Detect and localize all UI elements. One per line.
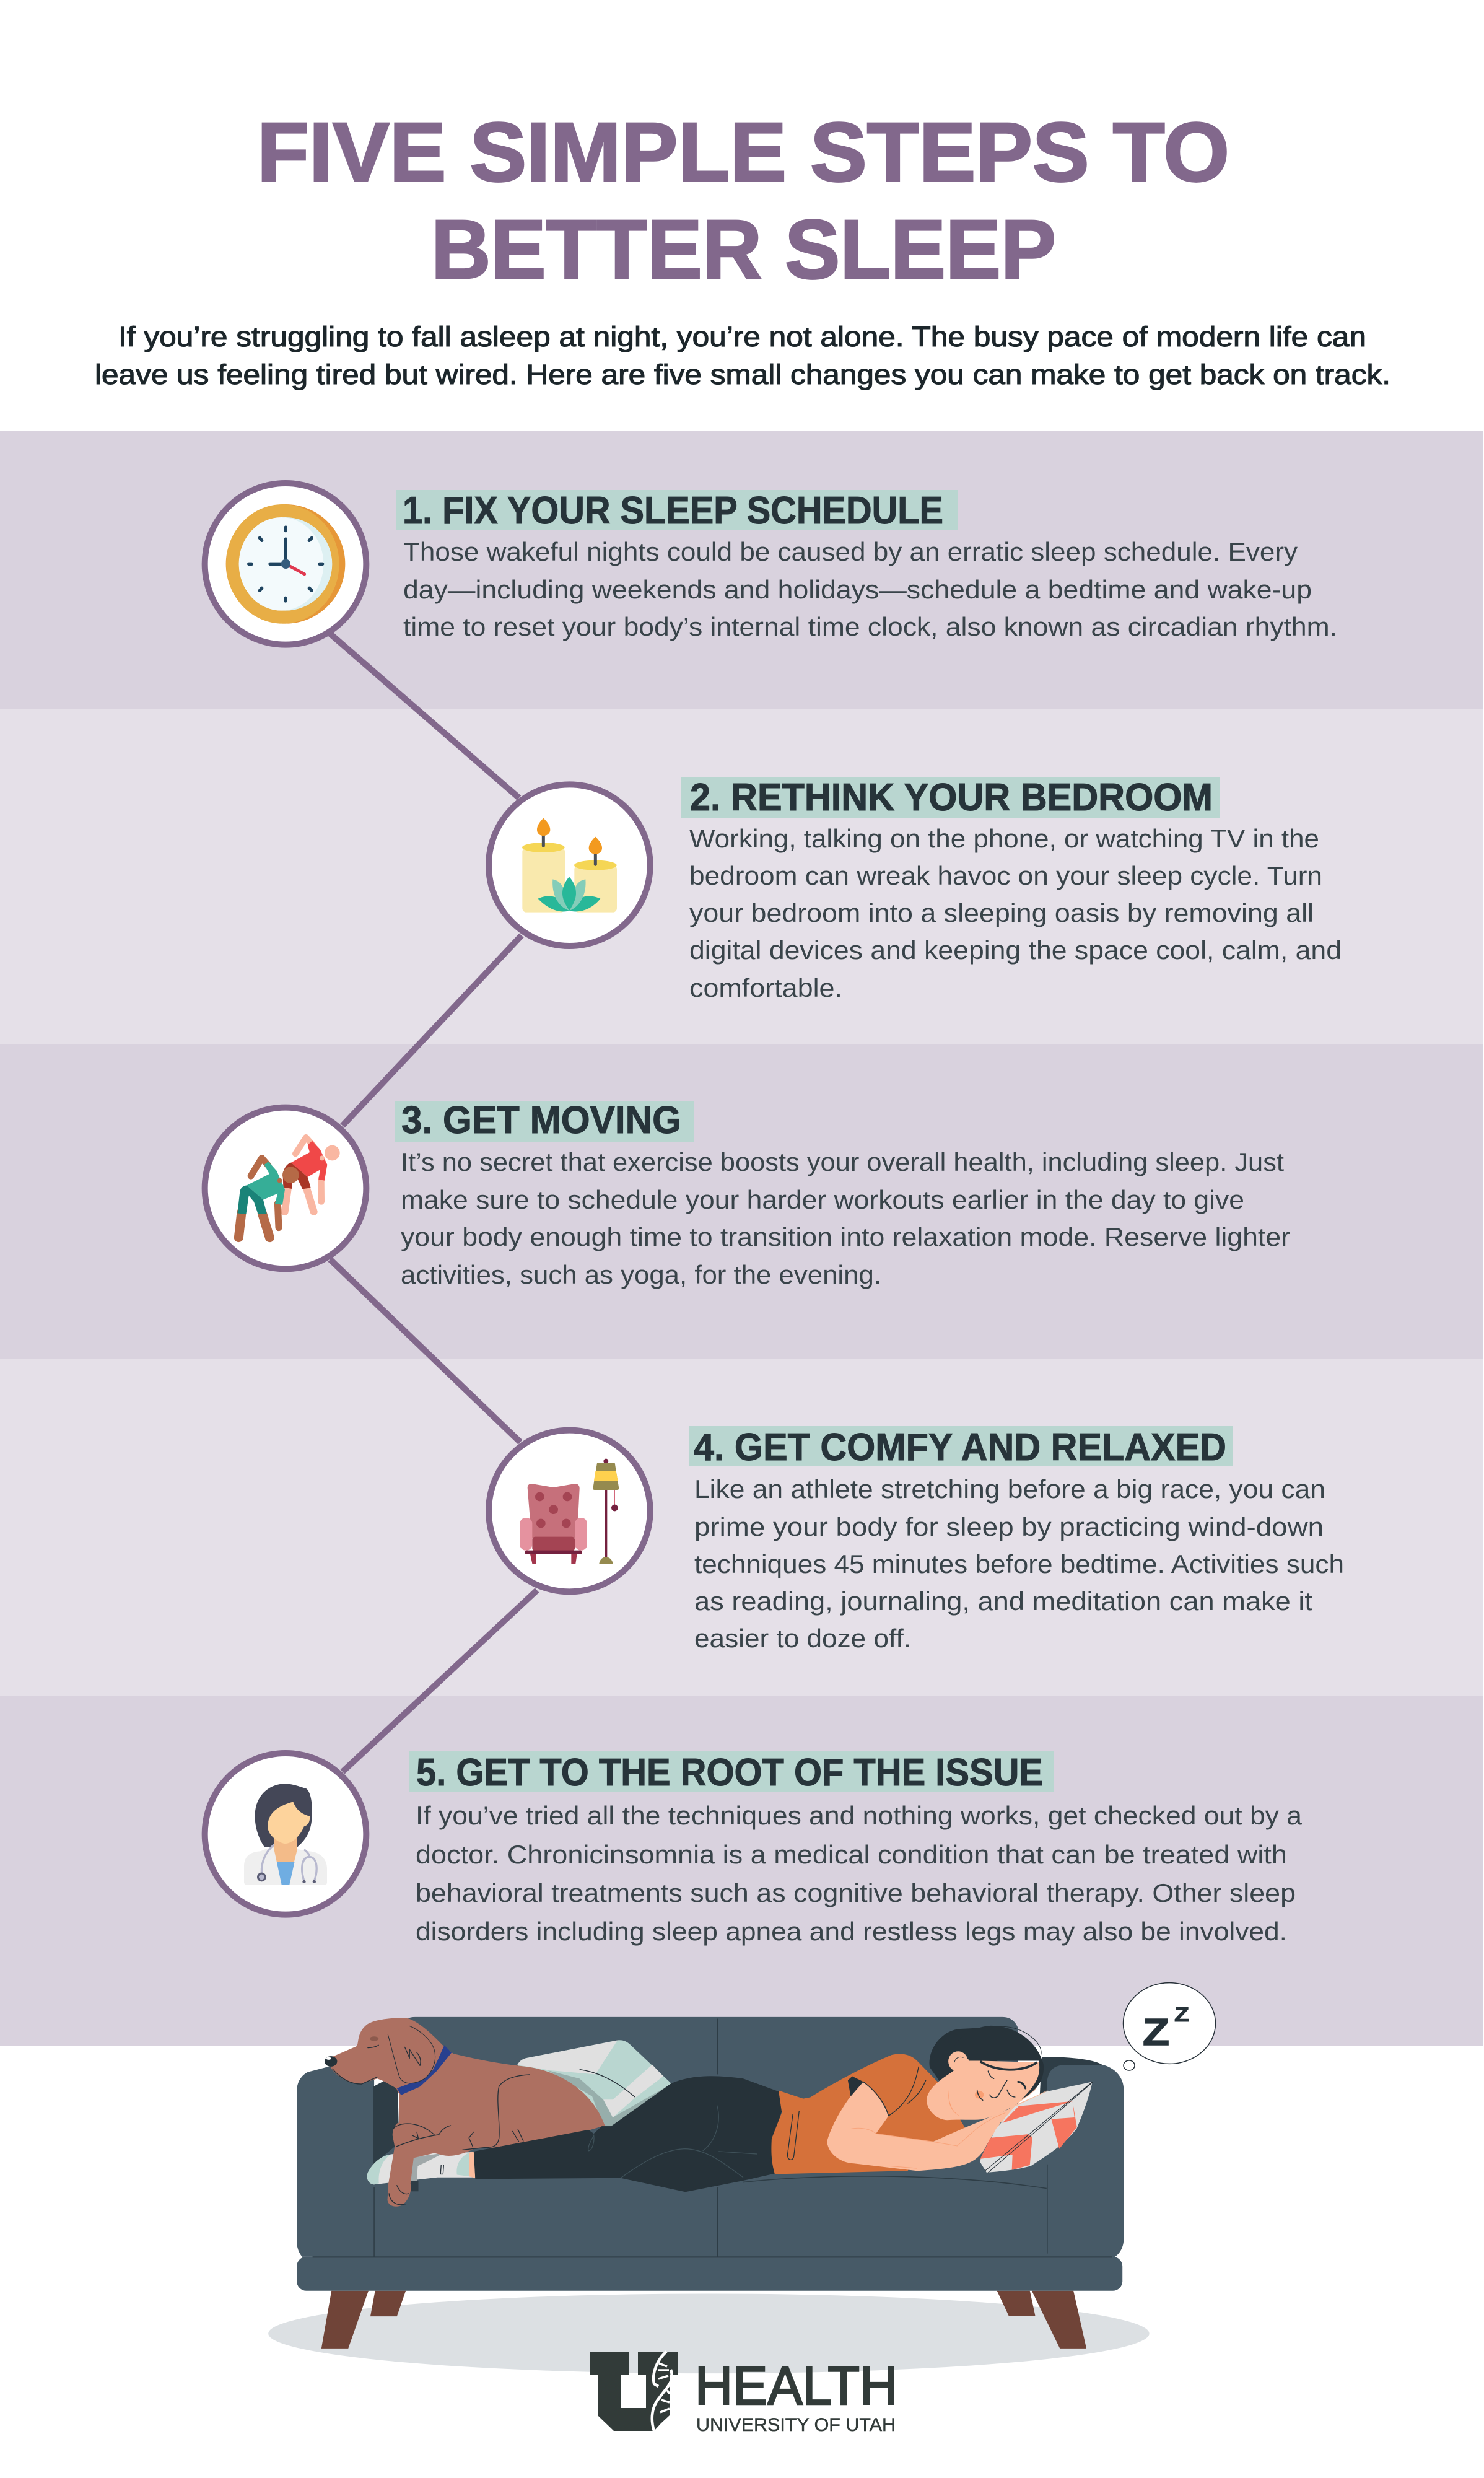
intro text: If you’re struggling to fall asleep at night, you’re not alone. The busy pace of modern life can	[118, 321, 1366, 352]
sock and foot	[367, 2152, 475, 2191]
body text: step 2: your bedroom into a sleeping oasis by removing all	[689, 898, 1314, 927]
step 4	[489, 1426, 1344, 1653]
panel: step 1 background	[0, 431, 1483, 709]
body text: step 2: comfortable.	[689, 973, 842, 1002]
heading: step 5: 5. GET TO THE ROOT OF THE ISSUE	[416, 1751, 1043, 1794]
panel: step 2 background	[0, 709, 1483, 1044]
step 3	[205, 1099, 1290, 1289]
body text: step 2: digital devices and keeping the space cool, calm, and	[689, 935, 1342, 965]
title: BETTER SLEEP	[431, 203, 1056, 296]
body text: step 4: as reading, journaling, and meditation can make it	[694, 1587, 1312, 1616]
connector path between steps	[330, 634, 537, 1772]
logo wordmark: HEALTH	[695, 2356, 897, 2416]
body text: step 5: doctor. Chronicinsomnia is a medical condition that can be treated with	[416, 1840, 1287, 1869]
body text: step 5: behavioral treatments such as cognitive behavioral therapy. Other sleep	[416, 1878, 1296, 1907]
body text: step 2: Working, talking on the phone, or watching TV in the	[689, 824, 1319, 853]
body text: step 3: It’s no secret that exercise boosts your overall health, including sleep. Just	[401, 1147, 1284, 1176]
body text: step 5: If you’ve tried all the techniques and nothing works, get checked out by a	[416, 1801, 1303, 1830]
heading: step 2: 2. RETHINK YOUR BEDROOM	[690, 776, 1213, 819]
body text: step 4: Like an athlete stretching before a big race, you can	[694, 1474, 1325, 1504]
pillow behind dog	[517, 2040, 671, 2126]
icon: two people stretching	[205, 1108, 366, 1269]
body text: step 4	[694, 1474, 1344, 1653]
panel: step 3 background	[0, 1044, 1483, 1359]
panel: step 5 background	[0, 1696, 1483, 2046]
step 2	[489, 776, 1342, 1002]
sofa	[297, 2017, 1124, 2291]
striped head pillow	[956, 2082, 1093, 2173]
title	[257, 105, 1229, 296]
body text: step 3: activities, such as yoga, for the evening.	[401, 1260, 881, 1289]
icon: candles and lotus	[489, 784, 650, 946]
thought bubble with sleeping Zs	[1124, 1983, 1215, 2070]
title: FIVE SIMPLE STEPS TO	[257, 105, 1229, 199]
thought bubble with sleeping Zs: Z	[1174, 2003, 1189, 2026]
body text: step 4: prime your body for sleep by practicing wind-down	[694, 1512, 1324, 1541]
heading: step 4: 4. GET COMFY AND RELAXED	[694, 1426, 1226, 1469]
logo mark: block U with DNA helix	[590, 2352, 678, 2431]
floor shadow	[268, 2293, 1150, 2373]
thought bubble with sleeping Zs: Z	[1143, 2011, 1169, 2053]
body text: step 1: time to reset your body’s internal time clock, also known as circadian rhythm.	[403, 612, 1337, 641]
logo wordmark: UNIVERSITY OF UTAH	[696, 2415, 896, 2435]
logo: University of Utah Health	[590, 2352, 897, 2435]
intro text	[95, 321, 1390, 390]
illustration: woman and dog sleeping on sofa	[268, 1983, 1216, 2373]
step 5	[205, 1751, 1303, 1946]
icon: clock	[205, 483, 366, 645]
sofa legs	[321, 2291, 1086, 2349]
body text: step 1: Those wakeful nights could be caused by an erratic sleep schedule. Every	[403, 537, 1298, 566]
icon: armchair and floor lamp	[489, 1430, 650, 1591]
body text: step 3: make sure to schedule your harder workouts earlier in the day to give	[401, 1185, 1244, 1214]
body text: step 5: disorders including sleep apnea and restless legs may also be involved.	[416, 1917, 1287, 1946]
body text: step 3: your body enough time to transition into relaxation mode. Reserve lighter	[401, 1222, 1290, 1251]
dog	[325, 2018, 605, 2207]
body text: step 4: easier to doze off.	[694, 1624, 911, 1653]
woman lying down	[474, 2026, 1048, 2192]
body text: step 2	[689, 824, 1342, 1002]
heading: step 3: 3. GET MOVING	[401, 1099, 681, 1142]
body text: step 3	[401, 1147, 1290, 1289]
step 1	[205, 483, 1337, 645]
body text: step 1	[403, 537, 1337, 641]
icon: doctor with stethoscope	[205, 1753, 366, 1915]
body text: step 2: bedroom can wreak havoc on your sleep cycle. Turn	[689, 861, 1322, 890]
intro text: leave us feeling tired but wired. Here are five small changes you can make to get back on track.	[95, 359, 1390, 390]
body text: step 1: day—including weekends and holidays—schedule a bedtime and wake-up	[403, 575, 1312, 604]
panel: step 4 background	[0, 1359, 1483, 1696]
body text: step 5	[416, 1801, 1303, 1946]
body text: step 4: techniques 45 minutes before bedtime. Activities such	[694, 1549, 1344, 1578]
heading: step 1: 1. FIX YOUR SLEEP SCHEDULE	[403, 489, 943, 532]
